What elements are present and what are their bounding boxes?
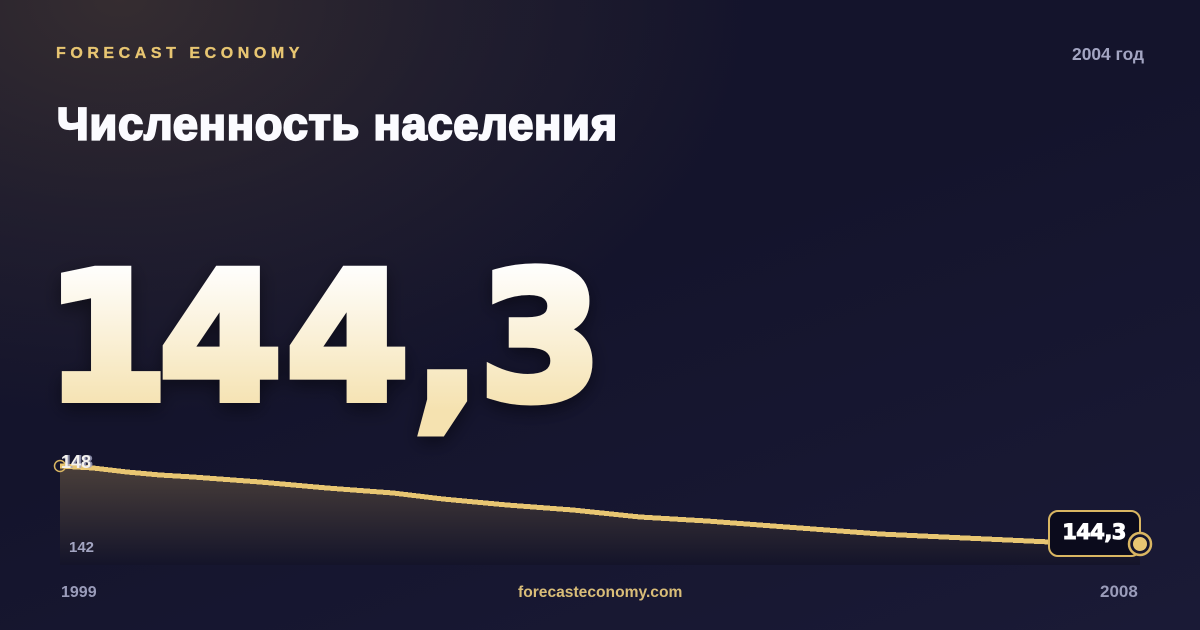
area chart [54,452,1140,565]
title: Численность населения [57,98,617,150]
start marker [54,460,66,472]
website: forecasteconomy.com [518,584,682,601]
trend line [60,466,1140,545]
current value callout: 144,3 [1062,520,1126,544]
year label: 2004 год [1072,44,1144,64]
max axis label: overlapping values: 148 [61,452,91,472]
main value: 144,3 [46,236,602,449]
end marker [1129,533,1151,555]
brand label: FORECAST ECONOMY [56,45,304,62]
start year: 1999 [61,584,97,601]
min axis label: 142 [69,539,94,556]
end year: 2008 [1100,582,1138,601]
current value callout [1049,511,1140,556]
chart area fill [60,466,1140,565]
max axis label: overlapping values: 148 [63,452,93,472]
